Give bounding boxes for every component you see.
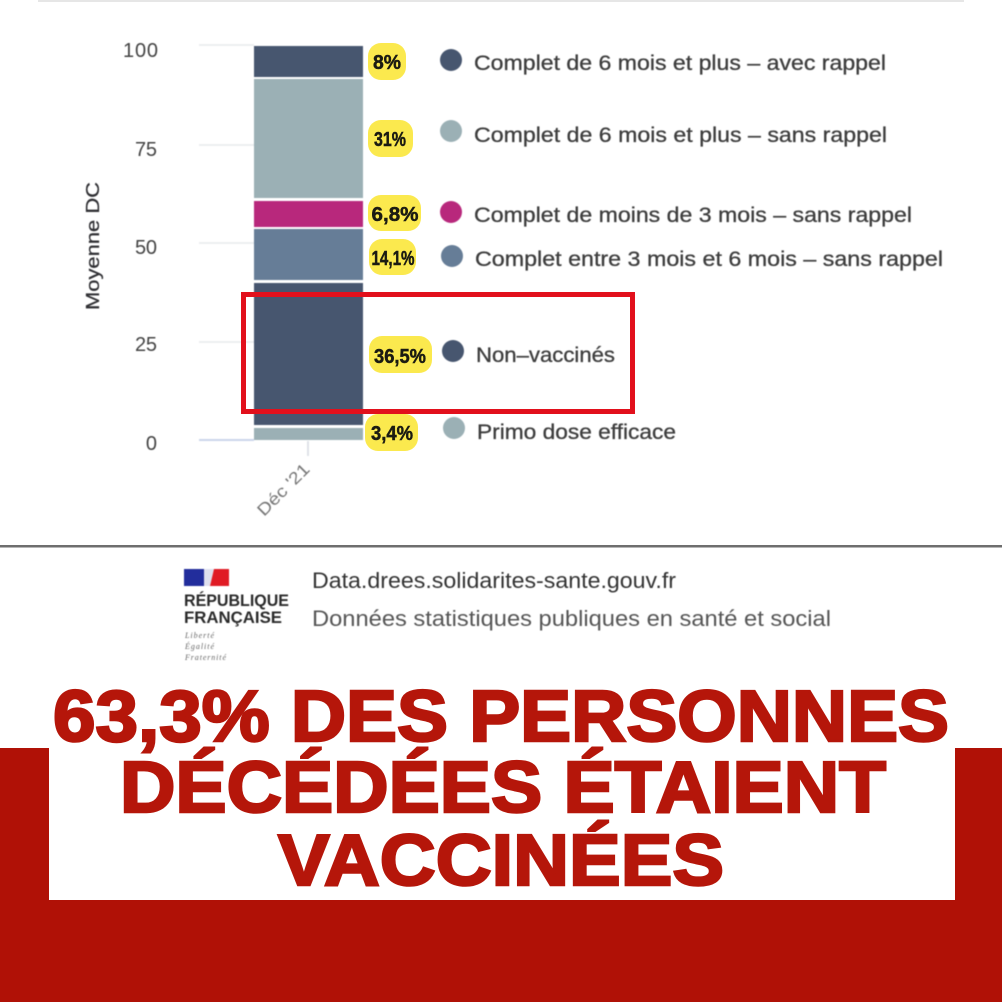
y axis labels: 0 — [146, 433, 157, 455]
value badge: 8% — [368, 43, 406, 80]
legend item: non-vaccinés — [442, 340, 615, 367]
value badge: 31%: 31% — [374, 129, 406, 151]
logo: République Française: Liberté — [184, 631, 214, 640]
logo: République Française: Égalité — [184, 641, 214, 651]
logo: République Française: FRANÇAISE — [184, 608, 282, 627]
y axis labels: 25 — [135, 334, 157, 356]
legend item: non-vaccinés: Non–vaccinés — [476, 344, 615, 367]
legend item: primo dose efficace: Primo dose efficace — [477, 421, 676, 444]
icon: French flag marianne — [184, 569, 229, 586]
logo: République Française: Fraternité — [184, 653, 226, 662]
value badge: 6,8% — [368, 195, 421, 231]
value badge: 8%: 8% — [373, 52, 401, 74]
headline: 63,3% DES PERSONNES — [53, 677, 949, 757]
value badge: 3,4% — [365, 414, 418, 451]
logo: République Française: RÉPUBLIQUE — [184, 591, 289, 610]
stacked bar chart — [83, 40, 363, 520]
y axis labels: 75 — [135, 139, 157, 161]
headline — [53, 677, 949, 901]
callout: red highlight box around non-vaccinés — [244, 294, 632, 412]
value badge: 31% — [368, 120, 413, 157]
y axis labels: 50 — [135, 237, 157, 259]
y axis title: Moyenne DC — [83, 182, 103, 310]
legend item: complet moins de 3 mois: Complet de moins de 3 mois – sans rappel — [474, 204, 912, 227]
y axis labels — [123, 40, 158, 455]
value badge: 14,1%: 14,1% — [372, 248, 415, 270]
bar segment: complet 6 mois et plus avec rappel — [254, 46, 363, 77]
source description: Données statistiques publiques en santé et social — [312, 606, 831, 631]
bar segment: complet moins de 3 mois — [254, 201, 363, 227]
value badge: 36,5%: 36,5% — [374, 346, 426, 368]
y axis labels: 100 — [123, 40, 158, 62]
value badge: 36,5% — [369, 336, 432, 373]
x axis label: Déc '21 — [253, 460, 313, 520]
bar segment: non-vaccinés — [254, 283, 363, 425]
value badge: 3,4%: 3,4% — [371, 423, 413, 445]
value badge: 14,1% — [369, 239, 416, 275]
legend item: primo dose efficace — [443, 417, 676, 444]
value badge: 6,8%: 6,8% — [372, 204, 419, 226]
bar segment: complet 6 mois et plus sans rappel — [254, 79, 363, 198]
legend item: complet 6 mois et plus sans rappel: Complet de 6 mois et plus – sans rappel — [474, 124, 887, 147]
legend item: complet entre 3 et 6 mois: Complet entre 3 mois et 6 mois – sans rappel — [475, 248, 943, 271]
headline: DÉCÉDÉES ÉTAIENT — [120, 748, 886, 828]
headline: VACCINÉES — [278, 821, 724, 901]
bar segment: primo dose efficace — [254, 428, 363, 440]
red footer band — [0, 748, 1002, 1002]
source site name: Data.drees.solidarites-sante.gouv.fr — [312, 568, 676, 593]
logo: République Française — [184, 569, 289, 662]
bar segment: complet entre 3 et 6 mois — [254, 229, 363, 280]
legend item: complet 6 mois et plus avec rappel: Complet de 6 mois et plus – avec rappel — [474, 52, 886, 75]
